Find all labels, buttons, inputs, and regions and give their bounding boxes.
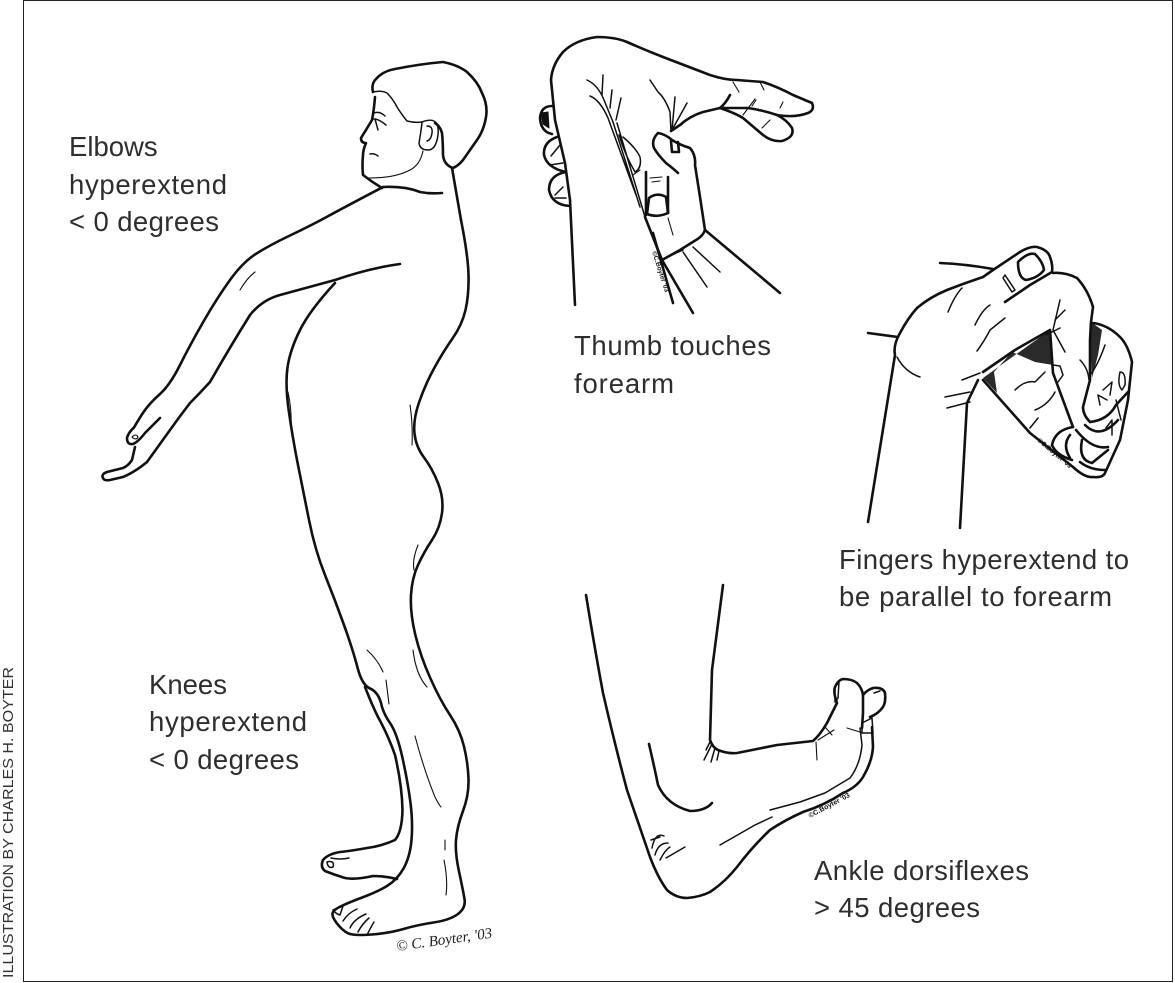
forearm and wrist creases <box>653 230 780 313</box>
thumb nail <box>647 195 668 216</box>
body contour details <box>132 272 447 895</box>
label: thumb: forearm <box>574 368 674 399</box>
forearm and back of hand <box>868 247 1052 522</box>
label: elbows: < 0 degrees <box>69 206 219 237</box>
neck and shoulder <box>383 168 461 220</box>
shin and top of foot <box>710 585 863 753</box>
label: thumb: Thumb touches <box>574 330 771 361</box>
ankle bone <box>649 744 712 811</box>
label: knees: hyperextend <box>149 706 307 737</box>
tendon lines <box>587 75 645 217</box>
artist signature: ©C.Boyter '03 <box>1036 436 1074 470</box>
artist signature: ©C.Boyter '03 <box>650 250 671 293</box>
label: knees: < 0 degrees <box>149 744 299 775</box>
heel and sole <box>586 595 873 898</box>
illustration credit: ILLUSTRATION BY CHARLES H. BOYTER <box>0 667 17 978</box>
lower finger <box>720 108 793 141</box>
label: knees: Knees <box>149 669 227 700</box>
rear leg and foot <box>322 687 402 879</box>
folded fingertips <box>1052 392 1128 470</box>
label: fingers: be parallel to forearm <box>839 581 1112 612</box>
palm diagonal <box>983 323 1132 477</box>
thumb <box>645 133 705 260</box>
hand: fingers hyperextended <box>868 247 1132 528</box>
label: ankle: Ankle dorsiflexes <box>814 855 1029 886</box>
foot: ankle dorsiflexed <box>586 585 885 898</box>
body outline <box>287 220 469 935</box>
label: elbows: Elbows <box>69 131 158 162</box>
toes <box>333 906 374 935</box>
hand: thumb touches forearm <box>540 37 813 313</box>
arm lower edge and hand <box>102 264 400 480</box>
copyright signature: © C. Boyter, '03 <box>395 926 493 955</box>
shadow areas <box>983 330 1053 393</box>
arm and hand top outline <box>551 37 813 305</box>
label: ankle: > 45 degrees <box>814 892 980 923</box>
label: elbows: hyperextend <box>69 169 227 200</box>
head <box>361 62 486 188</box>
wrist lines <box>868 263 993 528</box>
fingers behind forearm <box>540 106 570 206</box>
arm upper edge and thumb <box>127 187 383 444</box>
artist signature: ©C.Boyter '03 <box>807 791 851 820</box>
label: fingers: Fingers hyperextend to <box>839 544 1129 575</box>
thumb nail <box>1018 254 1044 280</box>
full body figure <box>102 62 486 935</box>
web of thumb <box>671 95 730 131</box>
creases <box>704 742 719 762</box>
index finger <box>1050 273 1093 427</box>
second toe <box>863 688 885 717</box>
